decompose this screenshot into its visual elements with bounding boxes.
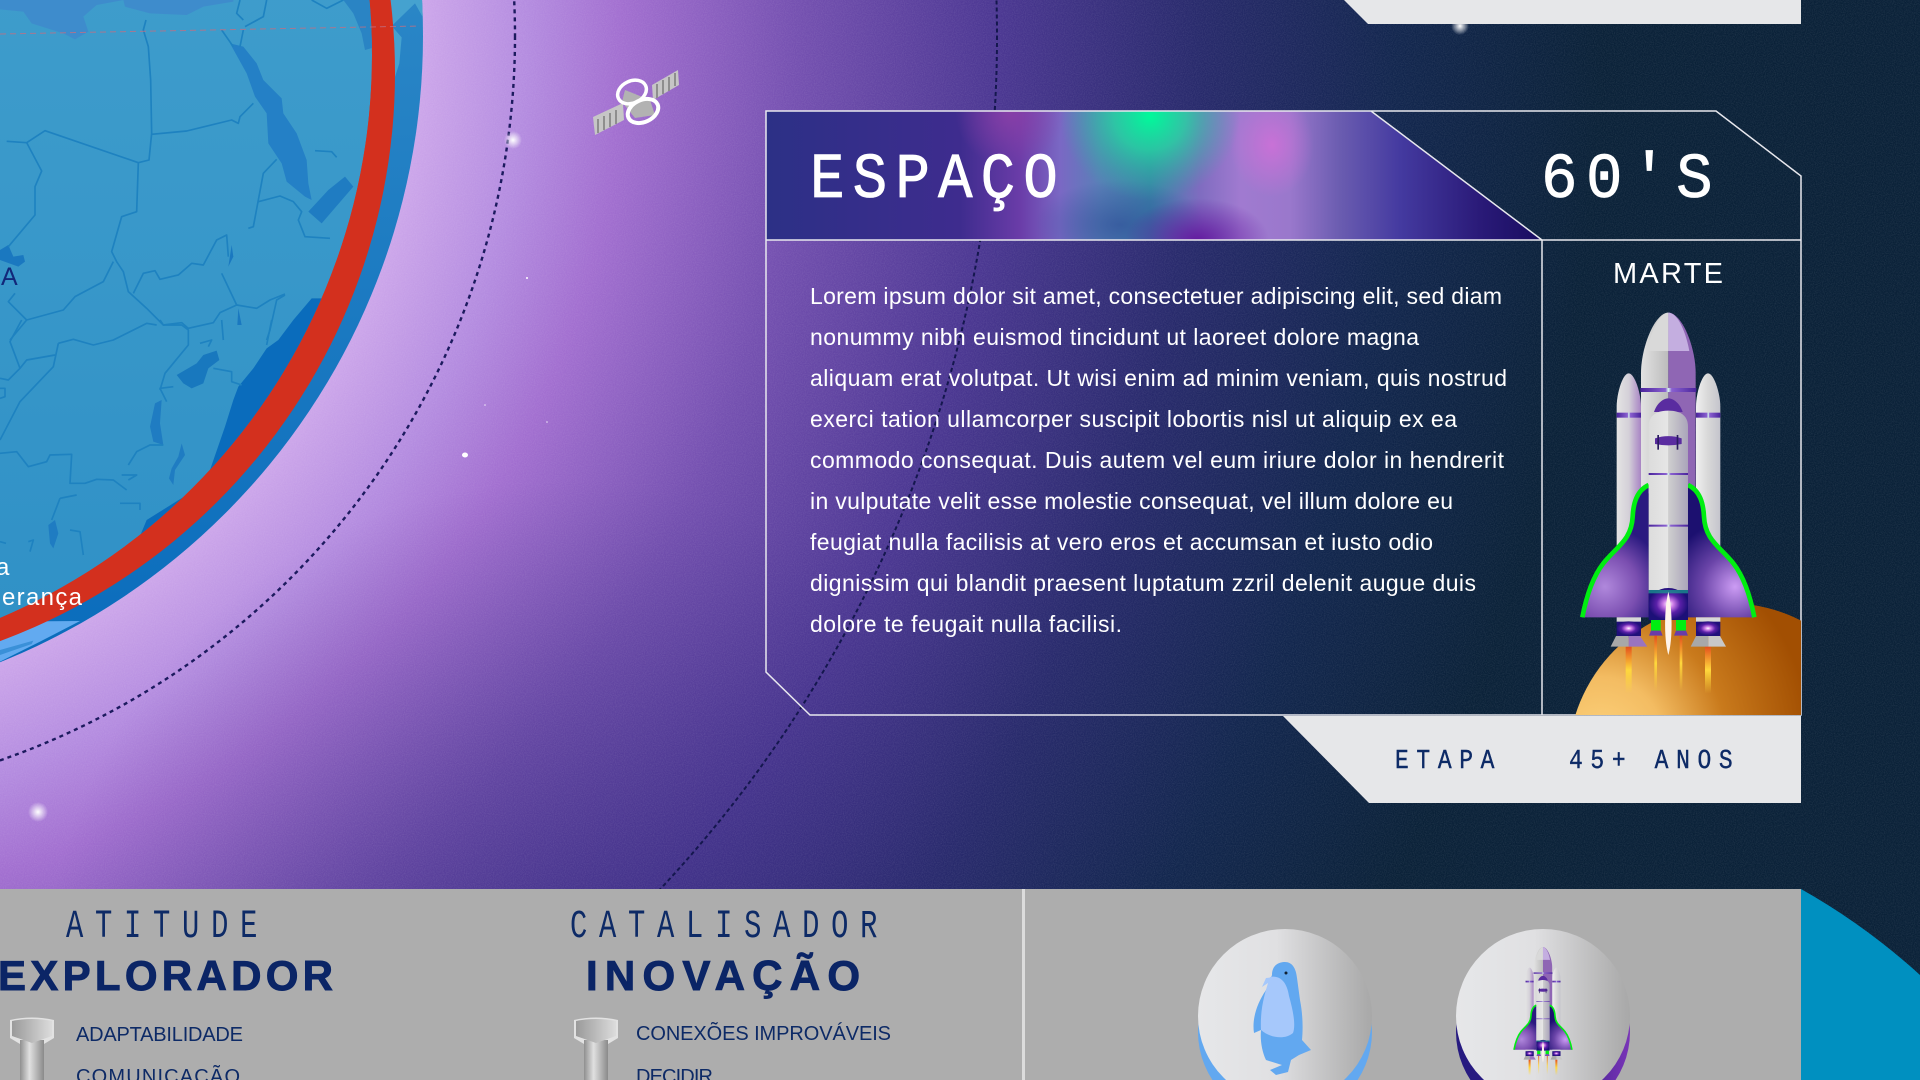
icon: pillar [574, 1018, 618, 1080]
dotted orbit: inner [0, 0, 515, 803]
label: CATALISADOR: CATALISADOR [570, 905, 889, 950]
footer tab: Etapa 45+ anos: ETAPA [1395, 745, 1502, 777]
list item: ADAPTABILIDADE [76, 1024, 243, 1046]
panel: Espaço 60's [765, 110, 1802, 716]
body text: Lorem ipsum dolor sit amet, consectetuer adipiscing elit, sed diam [810, 283, 1502, 309]
badge: rocket [1456, 929, 1630, 1080]
heading: EXPLORADOR: EXPLORADOR [0, 952, 333, 999]
label: MARTE: MARTE [1613, 258, 1723, 290]
badge: penguin [1198, 929, 1372, 1080]
bottom corner blue shape [1801, 889, 1920, 1080]
heading: 60'S: 60'S [1541, 144, 1721, 216]
bottom grey band [0, 889, 1801, 1080]
list item: CONEXÕES IMPROVÁVEIS [636, 1021, 891, 1045]
red ring [0, 0, 395, 679]
body text: aliquam erat volutpat. Ut wisi enim ad minim veniam, quis nostrud [810, 365, 1507, 391]
label: ATITUDE: ATITUDE [66, 905, 269, 950]
globe edge details [0, 0, 430, 663]
column: Atitude [0, 905, 333, 1080]
body text: nonummy nibh euismod tincidunt ut laoreet dolore magna [810, 324, 1419, 350]
body text [810, 283, 1507, 637]
icon: penguin [1254, 962, 1311, 1075]
top white tab [1344, 0, 1801, 24]
map label: A: A [1, 263, 18, 291]
header aurora [766, 112, 1540, 240]
heading: INOVAÇÃO: INOVAÇÃO [586, 952, 860, 999]
map label: liderança: erança [2, 584, 83, 611]
body text: feugiat nulla facilisis at vero eros et accumsan et iusto odio [810, 529, 1433, 555]
body text: exerci tation ullamcorper suscipit lobortis nisl ut aliquip ex ea [810, 406, 1457, 432]
stars [28, 17, 1469, 822]
map label: liderança [0, 554, 83, 611]
heading: ESPAÇO: ESPAÇO [810, 144, 1066, 217]
dotted orbit: outer [0, 0, 997, 1080]
footer tab: Etapa 45+ anos [1283, 716, 1801, 803]
planet Mars [1575, 605, 1801, 715]
land map [0, 0, 377, 667]
illustration: space shuttle rocket [1582, 313, 1755, 693]
body text: dolore te feugait nulla facilisi. [810, 611, 1122, 637]
globe [0, 0, 430, 711]
footer tab: Etapa 45+ anos: 45+ ANOS [1569, 745, 1740, 777]
panel outline [766, 111, 1801, 715]
body text: commodo consequat. Duis autem vel eum iriure dolor in hendrerit [810, 447, 1505, 473]
icon: pillar [10, 1018, 54, 1080]
body text: dignissim qui blandit praesent luptatum zzril delenit augue duis [810, 570, 1476, 596]
icon: small rocket [1514, 947, 1572, 1075]
icon: satellite [593, 70, 679, 135]
column: Catalisador [570, 905, 891, 1080]
body text: in vulputate velit esse molestie consequat, vel illum dolore eu [810, 488, 1453, 514]
